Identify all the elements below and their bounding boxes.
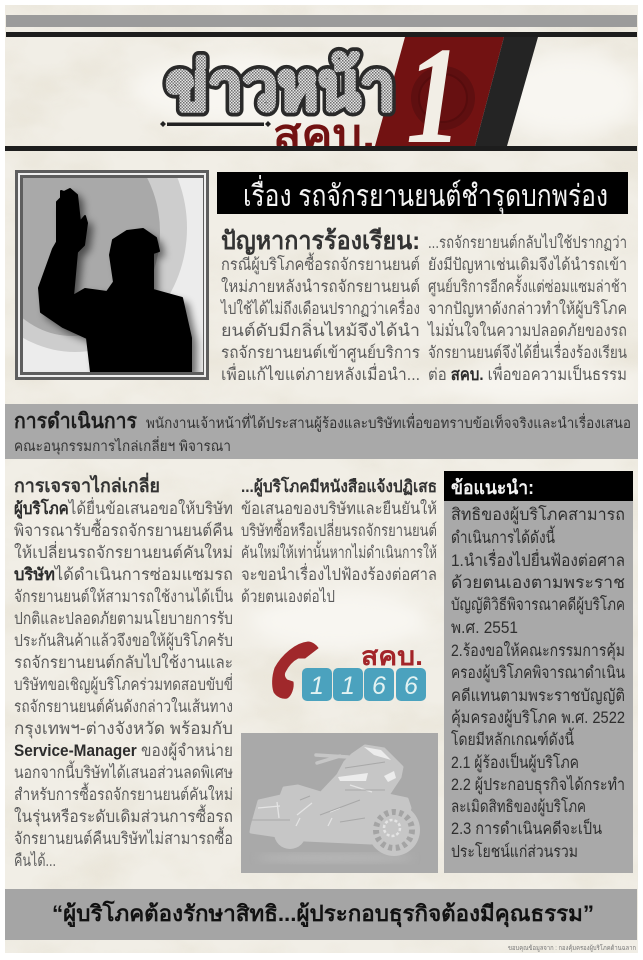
complaint text, column one: รถจักรยานยนต์เข้าศูนย์บริการ bbox=[221, 343, 420, 363]
advice heading: ข้อแนะนำ: bbox=[451, 477, 534, 499]
mediation text, column one: ในรุ่นหรือระดับเดิมส่วนการซื้อรถ bbox=[14, 804, 233, 827]
mediation text, column one: Service-Manager ของผู้จำหน่าย bbox=[14, 742, 233, 761]
header rule: bottom black line bbox=[5, 146, 637, 151]
rear wheel bbox=[274, 817, 306, 849]
masthead title: ข่าวหน้า bbox=[166, 49, 395, 123]
mediation text, column one: ให้เปลี่ยนรถจักรยานยนต์คันใหม่ bbox=[14, 541, 233, 562]
mediation text, column two: ...ผู้บริโภคมีหนังสือแจ้งปฏิเสธ bbox=[241, 476, 437, 498]
advice text: โดยมีหลักเกณฑ์ดังนี้ bbox=[451, 727, 574, 749]
advice text: ดำเนินการได้ดังนี้ bbox=[451, 525, 555, 547]
mediation text, column two: ด้วยตนเองต่อไป bbox=[241, 587, 335, 606]
complaint text, column one: ใหม่ภายหลังนำรถจักรยานยนต์ bbox=[221, 277, 420, 296]
hotline label: สคบ. bbox=[361, 641, 423, 671]
mediation text, column two: คันใหม่ให้เท่านั้นหากไม่ดำเนินการให้ bbox=[241, 540, 437, 562]
mediation text, column one: บริษัทขอเชิญผู้บริโภคร่วมทดสอบขับขี่ bbox=[14, 673, 233, 695]
advice heading bbox=[444, 471, 633, 501]
big number one: 1 bbox=[406, 19, 462, 173]
header rule: top black line bbox=[6, 32, 637, 37]
mediation text, column one: รถจักรยานยนต์คันดังกล่าวในเส้นทาง bbox=[14, 697, 233, 716]
mediation text, column one: ประกันสินค้าแล้วจึงขอให้ผู้บริโภครับ bbox=[14, 631, 233, 651]
advice text: พ.ศ. 2551 bbox=[451, 619, 518, 637]
action text: คณะอนุกรรมการไกล่เกลี่ยฯ พิจารณา bbox=[14, 436, 231, 455]
advice text: ละเมิดสิทธิของผู้บริโภค bbox=[451, 797, 586, 817]
story title bbox=[217, 172, 628, 215]
slogan band bbox=[5, 889, 637, 940]
advice text: 2.1 ผู้ร้องเป็นผู้บริโภค bbox=[451, 752, 579, 773]
mediation text, column two: จะขอนำเรื่องไปฟ้องร้องต่อศาล bbox=[241, 563, 437, 584]
hotline bbox=[273, 641, 426, 701]
sub-brand: สคบ. bbox=[273, 111, 375, 158]
raised hand figure bbox=[39, 189, 191, 372]
mediation text, column one: กรุงเทพฯ-ต่างจังหวัด พร้อมกับ bbox=[14, 720, 233, 739]
mediation text, column one: รถจักรยานยนต์กลับไปใช้งานและ bbox=[14, 653, 233, 672]
advice text: คดีแทนตามพระราชบัญญัติ bbox=[451, 687, 625, 705]
masthead bbox=[160, 37, 538, 146]
mediation text, column one: คืนได้... bbox=[14, 851, 56, 870]
hotline number tiles: 1 bbox=[341, 672, 355, 700]
mediation text, column one: ปกติและปลอดภัยตามนโยบายการรับ bbox=[14, 609, 233, 628]
complaint heading: ปัญหาการร้องเรียน: bbox=[221, 227, 420, 255]
motorcycle illustration bbox=[251, 746, 420, 862]
black slanted panel bbox=[475, 37, 538, 146]
seal watermark bbox=[411, 66, 475, 130]
mediation text, column one: นอกจากนี้บริษัทได้เสนอส่วนลดพิเศษ bbox=[14, 760, 233, 782]
mediation heading: การเจรจาไกล่เกลี่ย bbox=[14, 472, 160, 496]
mediation text, column two bbox=[241, 476, 437, 606]
icon: telephone handset bbox=[273, 642, 318, 698]
advice text: ประโยชน์แก่ส่วนรวม bbox=[451, 842, 578, 861]
hotline number tiles: 6 bbox=[404, 672, 418, 700]
complaint text, column one: กรณีผู้บริโภคซื้อรถจักรยานยนต์ bbox=[221, 252, 420, 275]
mediation text, column one: พิจารณารับซื้อรถจักรยานยนต์คืน bbox=[14, 518, 233, 540]
complaint text, column one bbox=[219, 227, 420, 384]
mediation text, column one: บริษัทได้ดำเนินการซ่อมแซมรถ bbox=[14, 565, 233, 584]
action heading: การดำเนินการ bbox=[14, 410, 138, 433]
complaint text, column one: เพื่อแก้ไขแต่ภายหลังเมื่อนำ... bbox=[221, 363, 420, 384]
header rule: grey bar bbox=[6, 15, 637, 27]
advice text: สิทธิของผู้บริโภคสามารถ bbox=[451, 505, 625, 525]
mediation text, column two: บริษัทซื้อหรือเปลี่ยนรถจักรยานยนต์ bbox=[241, 518, 437, 540]
mediation text, column one: จักรยานยนต์ให้สามารถใช้งานได้เป็น bbox=[14, 586, 233, 606]
photo panel: silhouette bbox=[15, 170, 209, 380]
advice text: 2.3 การดำเนินคดีจะเป็น bbox=[451, 818, 602, 838]
red slanted panel bbox=[375, 37, 504, 146]
motorcycle panel bbox=[241, 733, 438, 873]
advice text bbox=[451, 505, 625, 861]
mediation text, column one: จักรยานยนต์คืนบริษัทไม่สามารถซื้อ bbox=[14, 826, 233, 848]
hotline number tiles: 1 bbox=[310, 672, 324, 700]
front wheel bbox=[368, 804, 420, 856]
action band bbox=[5, 404, 638, 459]
action text bbox=[14, 413, 631, 455]
mediation text, column two: ข้อเสนอของบริษัทและยืนยันให้ bbox=[241, 499, 437, 518]
slogan text: “ผู้บริโภคต้องรักษาสิทธิ...ผู้ประกอบธุรกิจต้องมีคุณธรรม” bbox=[52, 900, 594, 928]
complaint text, column one: ไปใช้ได้ไม่ถึงเดือนปรากฏว่าเครื่อง bbox=[219, 297, 420, 318]
mediation text, column one: สำหรับการซื้อรถจักรยานยนต์คันใหม่ bbox=[14, 782, 233, 804]
complaint text, column one: ยนต์ดับมีกลิ่นไหม้จึงได้นำ bbox=[221, 319, 420, 340]
advice text: คุ้มครองผู้บริโภค พ.ศ. 2522 bbox=[451, 708, 625, 728]
advice text: 1.นำเรื่องไปยื่นฟ้องต่อศาล bbox=[451, 549, 625, 570]
hotline number tiles: 6 bbox=[372, 672, 386, 700]
mediation text, column one bbox=[14, 472, 233, 870]
complaint text, column two: ต่อ สคบ. เพื่อขอความเป็นธรรม bbox=[428, 363, 627, 384]
complaint text, column two bbox=[426, 233, 627, 384]
advice panel bbox=[444, 471, 633, 873]
mediation text, column one: ผู้บริโภคได้ยื่นข้อเสนอขอให้บริษัท bbox=[14, 497, 233, 520]
silhouette shadow bbox=[43, 193, 197, 377]
advice text: ด้วยตนเองตามพระราช bbox=[451, 574, 625, 592]
ornament line bbox=[160, 121, 271, 127]
hotline number tiles bbox=[302, 668, 426, 701]
masthead title: ข่าวหน้า bbox=[166, 49, 395, 123]
